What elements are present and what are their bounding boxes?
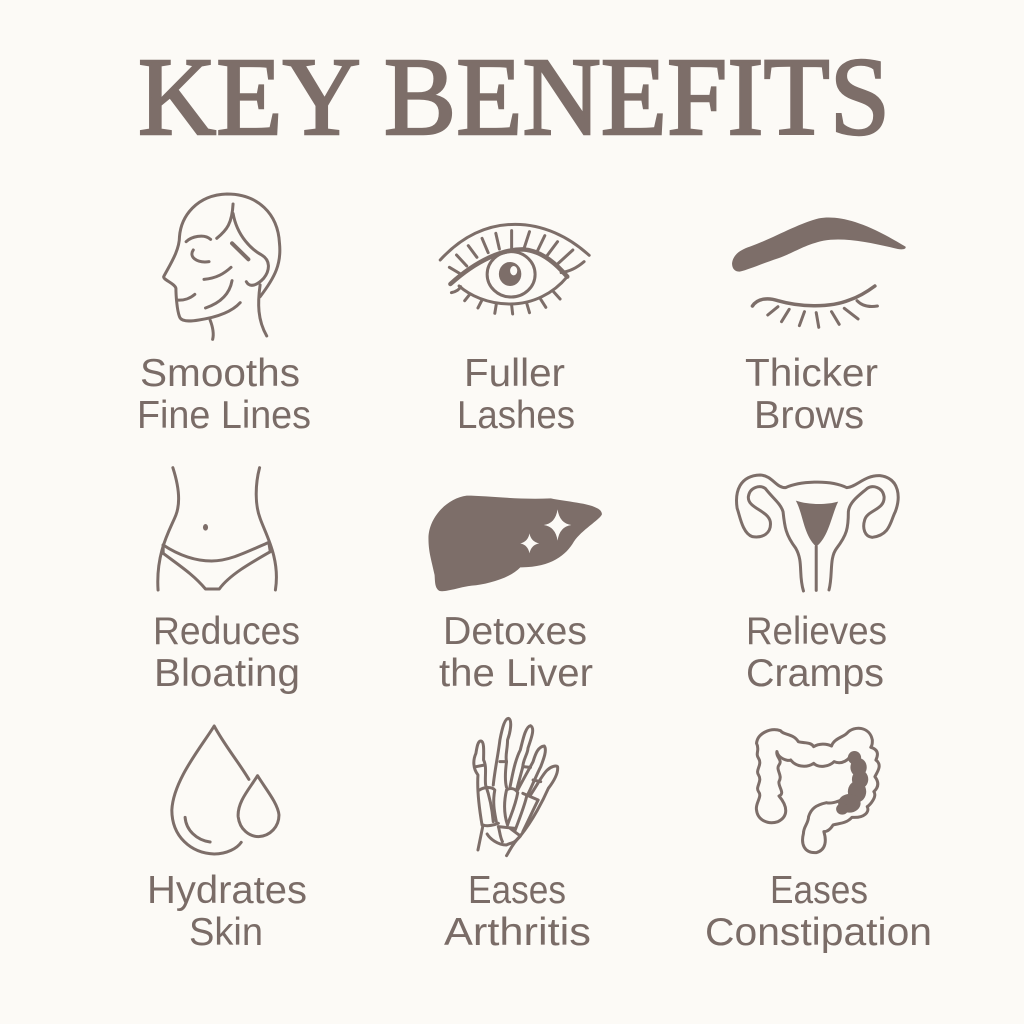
label: fuller lashes: Fuller — [464, 352, 565, 395]
label: relieves cramps: Relieves — [746, 610, 887, 653]
icon: water drops — [172, 726, 279, 854]
label: smooths fine lines: Smooths — [140, 352, 300, 395]
label: eases constipation: Constipation — [705, 911, 932, 954]
label: reduces bloating: Bloating — [154, 652, 300, 695]
panel: eases arthritis — [444, 718, 591, 954]
label: fuller lashes: Lashes — [457, 394, 575, 437]
icon: face profile with lines — [164, 194, 280, 339]
panel: eases constipation — [705, 728, 932, 954]
icon: torso with underwear — [158, 468, 276, 590]
label: hydrates skin — [147, 869, 307, 954]
panel: thicker brows — [732, 218, 906, 437]
label: smooths fine lines: Fine Lines — [137, 394, 311, 437]
icon: colon — [756, 728, 879, 853]
label: detoxes the liver: Detoxes — [443, 610, 587, 653]
label: hydrates skin: Hydrates — [147, 869, 307, 912]
panel: relieves cramps — [737, 475, 898, 695]
panel: smooths fine lines — [137, 194, 311, 437]
label: reduces bloating — [153, 610, 300, 695]
label: hydrates skin: Skin — [189, 911, 263, 954]
label: eases arthritis: Eases — [468, 869, 566, 912]
label: thicker brows: Thicker — [745, 352, 878, 395]
label: fuller lashes — [457, 352, 575, 437]
panel: reduces bloating — [153, 468, 300, 695]
label: eases constipation: Eases — [770, 869, 868, 912]
icon: hand skeleton — [474, 718, 558, 856]
title: KEY BENEFITS — [138, 36, 890, 159]
label: thicker brows: Brows — [754, 394, 864, 437]
label: smooths fine lines — [137, 352, 311, 437]
label: eases arthritis: Arthritis — [444, 911, 591, 954]
label: thicker brows — [745, 352, 878, 437]
icon: uterus — [737, 475, 898, 591]
label: detoxes the liver — [439, 610, 593, 695]
label: reduces bloating: Reduces — [153, 610, 300, 653]
panel: detoxes the liver — [428, 496, 602, 695]
icon: open eye with lashes — [440, 224, 589, 314]
panel: hydrates skin — [147, 726, 307, 954]
label: relieves cramps: Cramps — [746, 652, 884, 695]
label: detoxes the liver: the Liver — [439, 652, 593, 695]
icon: liver with sparkles — [428, 496, 602, 591]
icon: eyebrow and closed eye — [732, 218, 906, 327]
panel: fuller lashes — [440, 224, 589, 437]
label: eases arthritis — [444, 869, 591, 954]
label: eases constipation — [705, 869, 932, 954]
label: relieves cramps — [746, 610, 887, 695]
